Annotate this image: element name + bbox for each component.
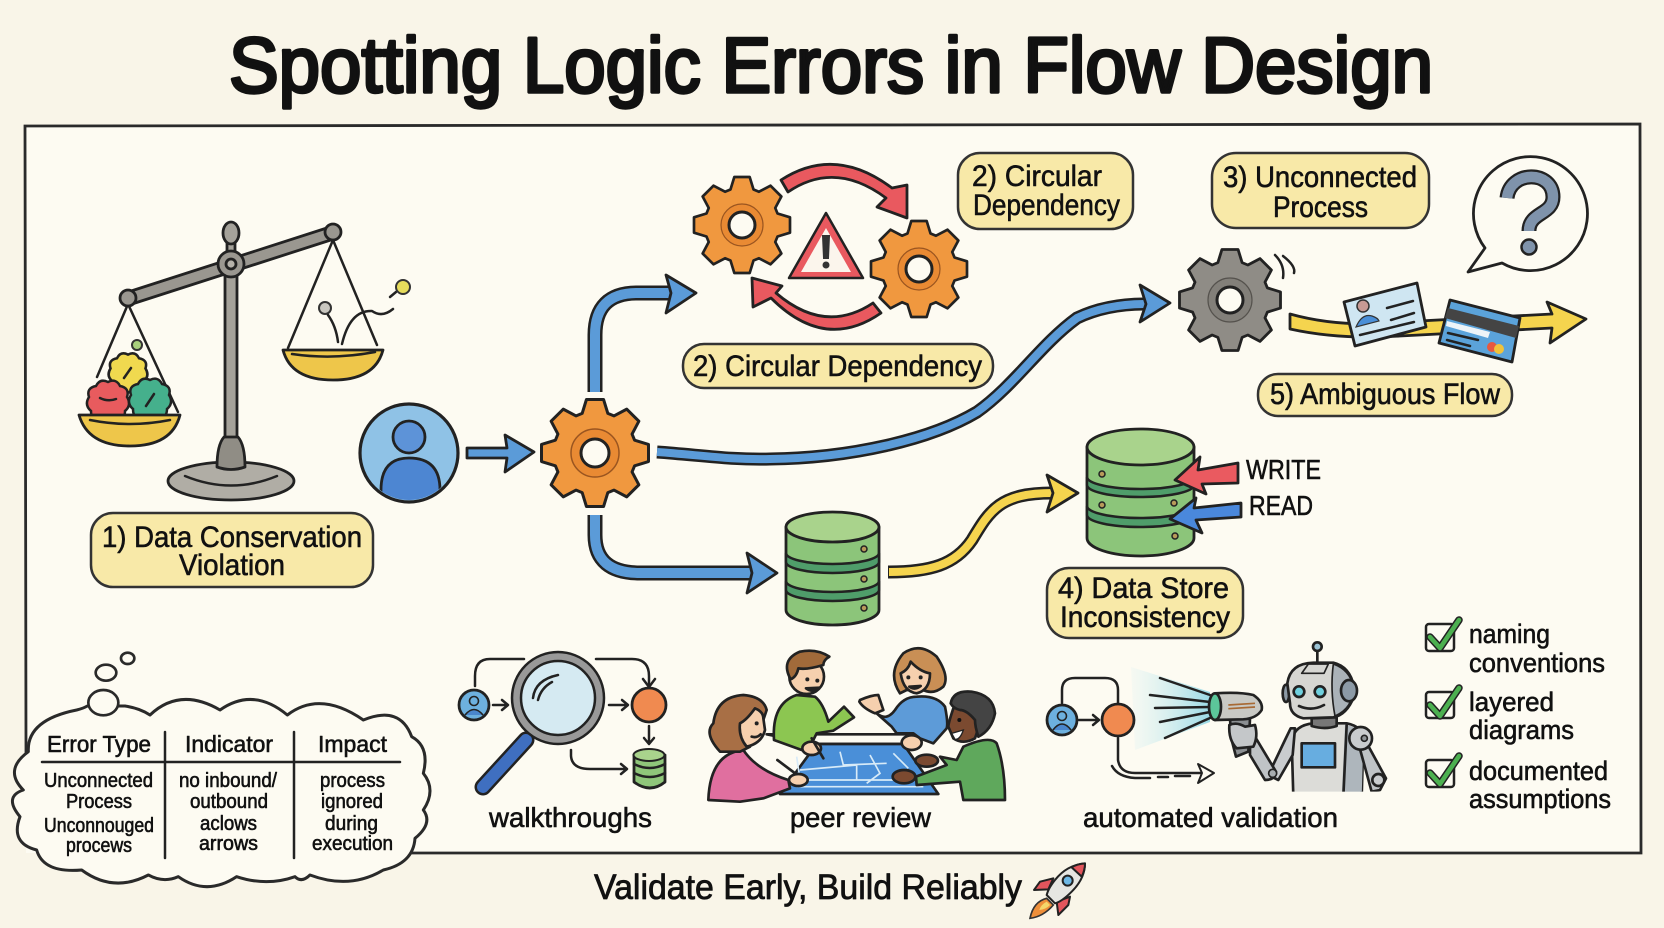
icon: small data store: [786, 512, 879, 625]
label: ambiguous flow: 5) Ambiguous Flow: [1270, 378, 1500, 411]
item: naming conventions: [1426, 619, 1605, 678]
icon: magnifying glass: [483, 652, 604, 787]
mini flow diagram: [1047, 678, 1214, 783]
label: data store inconsistency: [1047, 568, 1243, 638]
arrow: read: [1170, 498, 1241, 533]
icon: warning triangle: [789, 213, 863, 278]
icon: user: [360, 404, 458, 505]
table column: impact: during: [325, 813, 378, 835]
icon: balance scale: [79, 222, 410, 500]
illustration: peer review team: [708, 648, 1005, 802]
title: Spotting Logic Errors in Flow Design: [229, 21, 1433, 109]
table column: indicator: no inbound/: [179, 770, 277, 792]
table column: impact: [312, 770, 393, 855]
arrow: ambiguous flow: [1290, 283, 1586, 362]
table header: [47, 731, 388, 757]
item: layered diagrams: layered: [1469, 687, 1554, 717]
label: data conservation violation: Violation: [179, 549, 285, 582]
arrow: write: [1175, 457, 1238, 494]
label: unconnected process: [1212, 153, 1429, 228]
person: man in green: [774, 651, 854, 758]
table column: error type: Unconnected: [44, 770, 153, 792]
table column: indicator: [179, 770, 277, 855]
item: layered diagrams: diagrams: [1469, 715, 1574, 745]
table column: impact: execution: [312, 833, 393, 855]
label: data store inconsistency: Inconsistency: [1060, 601, 1230, 634]
table header: Error Type: [47, 731, 151, 757]
robot: [1209, 642, 1386, 797]
label: unconnected process: Process: [1273, 191, 1368, 224]
table column: impact: ignored: [321, 791, 383, 813]
label: automated validation: automated validation: [1083, 802, 1338, 833]
label: read: READ: [1249, 490, 1313, 521]
icon: rocket: [1030, 863, 1085, 918]
label: circular dependency (top): [958, 153, 1133, 229]
label: walkthroughs: walkthroughs: [488, 802, 652, 833]
icon: large data store: [1087, 429, 1194, 556]
footer tagline: Validate Early, Build Reliably: [594, 868, 1022, 907]
person: woman in blue: [859, 648, 947, 750]
arrow: bottom red loop: [752, 278, 881, 329]
icon: walkthroughs magnifier diagram: [459, 652, 666, 788]
table column: indicator: outbound: [190, 791, 268, 813]
icon: speech bubble with question mark: [1468, 157, 1587, 272]
arrow: to circular dependency: [595, 275, 696, 392]
table with blueprint: [767, 734, 938, 794]
person: man with dark skin: [893, 691, 1005, 800]
person: woman in pink: [708, 695, 808, 802]
icon: data blobs on left pan: [87, 340, 171, 423]
arrow: user to process: [467, 435, 534, 472]
icon: gray gear: [1180, 250, 1294, 350]
table header: Indicator: [185, 731, 273, 757]
scan beam: [1131, 667, 1210, 750]
illustration: automated validation robot: [1047, 642, 1386, 797]
panel: main frame: [25, 124, 1641, 853]
label: unconnected process: 3) Unconnected: [1223, 161, 1417, 194]
item: naming conventions: naming: [1469, 619, 1550, 649]
scanner: [1209, 693, 1262, 757]
arrow: to data store: [595, 515, 777, 593]
label: write: WRITE: [1246, 454, 1321, 485]
label: data store inconsistency: 4) Data Store: [1058, 572, 1229, 605]
table column: error type: [44, 770, 154, 857]
checklist: [1426, 619, 1611, 814]
item: documented assumptions: [1426, 756, 1611, 814]
icon: central orange gear: [542, 400, 648, 506]
icon: escaping data dots: [319, 280, 410, 344]
item: documented assumptions: assumptions: [1469, 784, 1611, 814]
item: naming conventions: conventions: [1469, 648, 1605, 678]
label: data conservation violation: [91, 513, 373, 587]
label: peer review: peer review: [790, 802, 932, 833]
item: layered diagrams: [1426, 687, 1574, 745]
item: documented assumptions: documented: [1469, 756, 1608, 786]
table column: indicator: arrows: [199, 833, 258, 855]
arrow: top red loop: [781, 164, 907, 218]
icon: circular dependency: [694, 164, 967, 329]
label: circular dependency (top): Dependency: [973, 189, 1120, 222]
label: circular dependency (top): 2) Circular: [972, 160, 1102, 193]
arrow: yellow data store flow: [888, 475, 1078, 572]
table column: error type: Process: [66, 791, 132, 813]
table column: indicator: aclows: [200, 813, 257, 835]
table column: error type: Unconnouged: [44, 815, 154, 837]
label: data conservation violation: 1) Data Conservation: [102, 521, 362, 554]
label: circular dependency (bottom): 2) Circular Dependency: [693, 350, 982, 383]
table column: impact: process: [320, 770, 385, 792]
icon: id card: [1344, 283, 1426, 346]
table header: Impact: [318, 731, 388, 757]
arrow: to unconnected process: [657, 285, 1170, 459]
icon: credit card: [1439, 300, 1520, 362]
panel: error table thought cloud: [12, 653, 430, 887]
table column: error type: procews: [66, 835, 132, 857]
